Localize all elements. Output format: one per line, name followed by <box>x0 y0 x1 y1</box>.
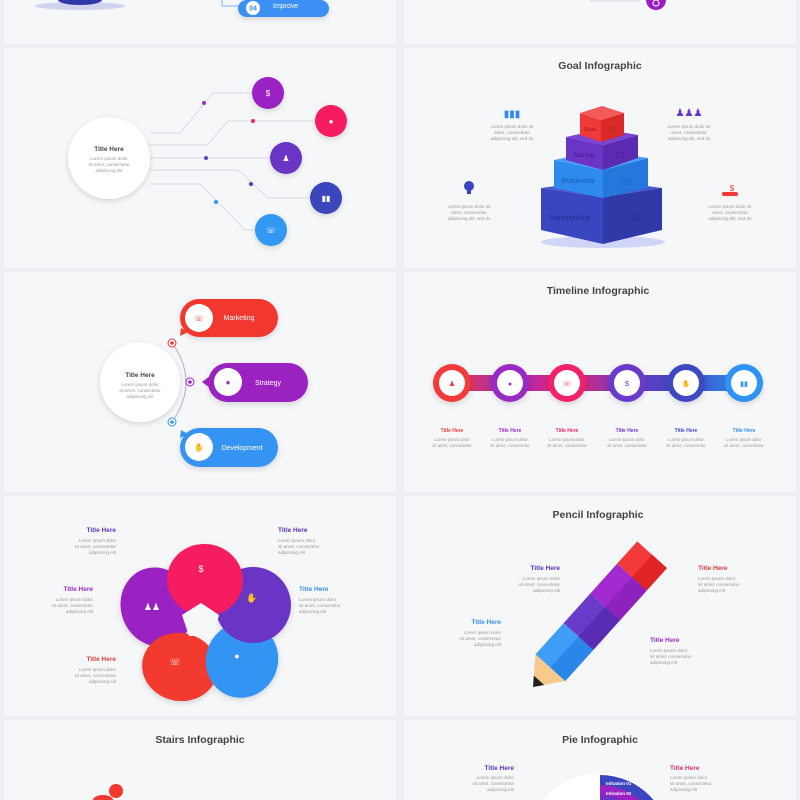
icon + text: chart: ▮▮▮ <box>504 109 520 120</box>
title: Stairs Infographic <box>155 734 245 746</box>
icon + text: money hand: Lorem ipsum dolor sit <box>708 204 752 209</box>
title: Goal Infographic <box>558 60 642 72</box>
icon + text: people: amet, consectetur <box>671 130 707 135</box>
chain: ♟ <box>449 380 455 388</box>
timeline labels: Title Here <box>556 428 579 434</box>
panel: timeline infographic: Lorem ipsum dolor <box>726 437 762 442</box>
center circle <box>100 342 180 422</box>
text blocks: Title Here <box>530 565 560 572</box>
icon + text: money hand: amet, consectetur <box>712 210 748 215</box>
chain: ● <box>508 381 512 388</box>
pyramid: 02 <box>616 151 625 160</box>
panel: pencil infographic: Lorem ipsum dolor <box>464 630 502 635</box>
panel: pie infographic <box>472 734 712 800</box>
panel: mind map <box>68 77 347 246</box>
text blocks: Title Here <box>278 527 308 534</box>
text blocks <box>63 527 329 663</box>
title: Pencil Infographic <box>552 509 644 521</box>
pill: Development: Development <box>221 445 263 452</box>
center circle: Title Here <box>94 146 124 153</box>
panel: pentagon flower: sit amet, consectetur <box>74 673 116 678</box>
panel: pencil infographic: sit amet, consectetur <box>698 582 740 587</box>
text blocks: Title Here <box>86 656 116 663</box>
panel: stairs infographic <box>93 734 245 800</box>
pill: Strategy: Strategy <box>255 380 282 387</box>
icon + text: chart <box>490 109 534 141</box>
pill: Development <box>180 428 278 467</box>
text blocks: Title Here <box>471 619 501 626</box>
panel: timeline infographic: sit amet, consectetur <box>607 443 647 448</box>
pie chart: Infoation 02 <box>606 791 632 796</box>
panel: mind map: ♟ <box>282 154 290 163</box>
icon + text: money hand <box>708 184 752 221</box>
pyramid: Goal <box>584 127 597 133</box>
panel: pentagon flower: Lorem ipsum dolor <box>79 667 117 672</box>
center circle: Title Here <box>125 372 155 379</box>
panel: pentagon flower: $ <box>198 564 204 574</box>
panel: pencil infographic: sit amet, consectetur <box>650 654 692 659</box>
panel: timeline infographic: Lorem ipsum dolor <box>434 437 470 442</box>
panel: top right partial <box>590 0 666 10</box>
panel: pentagon flower: ✋ <box>246 592 258 603</box>
pyramid: Startup <box>574 153 595 159</box>
panel: pie infographic: sit amet, consectetur <box>670 781 712 786</box>
pyramid: Business <box>561 176 595 185</box>
icon + text: bulb: adipiscing elit, sed do <box>447 216 491 221</box>
chain: ▮▮ <box>740 381 748 388</box>
connector lines <box>148 93 315 230</box>
panel: pencil infographic: adipiscing elit <box>533 588 561 593</box>
timeline labels: Title Here <box>441 428 464 434</box>
panel: mind map: ● <box>329 117 334 126</box>
center circle: Lorem ipsum dolor <box>90 156 128 161</box>
pyramid: Partnership <box>549 213 591 222</box>
panel: pencil infographic <box>459 509 740 700</box>
panel: timeline infographic: sit amet, consectetur <box>724 443 764 448</box>
text blocks: Title Here <box>698 565 728 572</box>
icon + text: people: ♟♟♟ <box>676 108 702 119</box>
pill: Strategy: ● <box>226 378 231 387</box>
panel: pie infographic: adipiscing elit <box>670 787 698 792</box>
pill: Marketing <box>180 299 278 337</box>
text blocks: Title Here <box>670 765 700 772</box>
panel: pentagon flower: ● <box>234 651 240 661</box>
panel: timeline infographic: Lorem ipsum dolor <box>668 437 704 442</box>
petals <box>109 538 291 708</box>
panel: mind map: $ <box>266 89 271 98</box>
panel: mind map: ☏ <box>266 226 276 235</box>
pyramid: 01 <box>609 127 616 133</box>
panel: timeline infographic: Lorem ipsum dolor <box>609 437 645 442</box>
panel: goal infographic <box>447 60 752 248</box>
timeline labels: Title Here <box>675 428 698 434</box>
panel: pencil infographic: sit amet, consectetur <box>518 582 560 587</box>
panel: pentagon flower: sit amet, consectetur <box>74 544 116 549</box>
panel: pencil infographic: Lorem ipsum dolor <box>523 576 561 581</box>
center circle: Lorem ipsum dolor <box>121 382 159 387</box>
pill: 04 Improve <box>222 0 329 17</box>
panel: pie infographic: sit amet, consectetur <box>472 781 514 786</box>
icon + text: chart: adipiscing elit, sed do <box>490 136 534 141</box>
panel: pencil infographic: Lorem ipsum dolor <box>698 576 736 581</box>
icon + text: people: adipiscing elit, sed do <box>667 136 711 141</box>
panel: pie infographic: adipiscing elit <box>487 787 515 792</box>
panel: pentagon flower: sit amet, consectetur <box>278 544 320 549</box>
title: Timeline Infographic <box>547 285 649 297</box>
node circles <box>252 77 347 246</box>
icon + text: chart: amet, consectetur <box>494 130 530 135</box>
pill: Marketing: Marketing <box>224 315 254 322</box>
panel: pencil infographic: adipiscing elit <box>698 588 726 593</box>
icon + text: bulb <box>447 181 491 221</box>
pie chart: Infoation 01 <box>606 781 632 786</box>
panel: pentagon flower <box>51 527 341 708</box>
panel: pentagon flower: Lorem ipsum dolor <box>56 597 94 602</box>
panel: pentagon flower: sit amet, consectetur <box>51 603 93 608</box>
title: Pie Infographic <box>562 734 638 746</box>
timeline labels: Title Here <box>733 428 756 434</box>
pyramid <box>541 106 665 248</box>
text blocks: Title Here <box>650 637 680 644</box>
icon + text: people <box>667 108 711 141</box>
icon + text: chart: Lorem ipsum dolor sit <box>490 124 534 129</box>
center circle: sit amet, consectetur <box>88 162 130 167</box>
panel: pills diagram <box>100 299 308 467</box>
center circle: adipiscing elit <box>95 168 123 173</box>
panel: pentagon flower: adipiscing elit <box>299 609 327 614</box>
panel: pentagon flower: sit amet, consectetur <box>299 603 341 608</box>
pyramid: 03 <box>621 177 631 187</box>
icon: red figure <box>93 784 123 800</box>
panel: pentagon flower: Lorem ipsum dolor <box>299 597 337 602</box>
text blocks <box>471 565 728 644</box>
timeline labels: Title Here <box>499 428 522 434</box>
chain: ☏ <box>563 380 572 388</box>
panel: pentagon flower: Lorem ipsum dolor <box>79 538 117 543</box>
panel: timeline infographic: sit amet, consectetur <box>547 443 587 448</box>
panel: timeline infographic: sit amet, consectetur <box>432 443 472 448</box>
pill: Strategy <box>202 363 308 402</box>
text blocks: Title Here <box>63 586 93 593</box>
timeline labels: Title Here <box>616 428 639 434</box>
panel: pentagon flower: ☏ <box>169 657 181 667</box>
text blocks: Title Here <box>299 586 329 593</box>
icon + text: people: Lorem ipsum dolor sit <box>667 124 711 129</box>
panel: pencil infographic: sit amet, consectetur <box>459 636 501 641</box>
center circle <box>68 117 150 199</box>
pill: 04 Improve: Improve <box>273 3 298 10</box>
panel: timeline infographic: sit amet, consectetur <box>666 443 706 448</box>
panel: pentagon flower: adipiscing elit <box>278 550 306 555</box>
panel: pie infographic: Lorem ipsum dolor <box>670 775 708 780</box>
chain: $ <box>625 381 629 388</box>
text blocks <box>484 765 700 772</box>
icon + text: bulb: Lorem ipsum dolor sit <box>447 204 491 209</box>
icon + text: money hand: $ <box>730 184 735 193</box>
text blocks: Title Here <box>86 527 116 534</box>
panel: pentagon flower: adipiscing elit <box>89 550 117 555</box>
pill: Development: ✋ <box>194 442 204 452</box>
panel: pentagon flower: adipiscing elit <box>89 679 117 684</box>
panel: timeline infographic: Lorem ipsum dolor <box>549 437 585 442</box>
pyramid: 04 <box>627 210 641 225</box>
panel: pentagon flower: ♟♟ <box>144 602 160 612</box>
chain <box>433 364 763 402</box>
panel: pencil infographic: adipiscing elit <box>474 642 502 647</box>
panel: timeline infographic <box>432 285 764 448</box>
icon + text: money hand: adipiscing elit, sed do <box>708 216 752 221</box>
panel: top left partial <box>35 0 329 17</box>
arc connector <box>172 343 186 422</box>
pencil <box>518 541 667 700</box>
icon + text: bulb: amet, consectetur <box>451 210 487 215</box>
panel: pie infographic: Lorem ipsum dolor <box>477 775 515 780</box>
panel: pentagon flower: Lorem ipsum dolor <box>278 538 316 543</box>
panel: timeline infographic: Lorem ipsum dolor <box>492 437 528 442</box>
panel: mind map: ▮▮ <box>322 194 330 203</box>
pill: Marketing: ☏ <box>194 314 204 323</box>
timeline labels <box>441 428 756 434</box>
pill: 04 Improve: 04 <box>249 6 257 12</box>
pie chart <box>544 773 656 800</box>
center circle: adipiscing elit <box>126 394 154 399</box>
chain: ✋ <box>682 379 690 388</box>
panel: pencil infographic: Lorem ipsum dolor <box>650 648 688 653</box>
panel: pencil infographic: adipiscing elit <box>650 660 678 665</box>
text blocks: Title Here <box>484 765 514 772</box>
panel: pentagon flower: adipiscing elit <box>66 609 94 614</box>
center circle: sit amet, consectetur <box>119 388 161 393</box>
panel: timeline infographic: sit amet, consectetur <box>490 443 530 448</box>
